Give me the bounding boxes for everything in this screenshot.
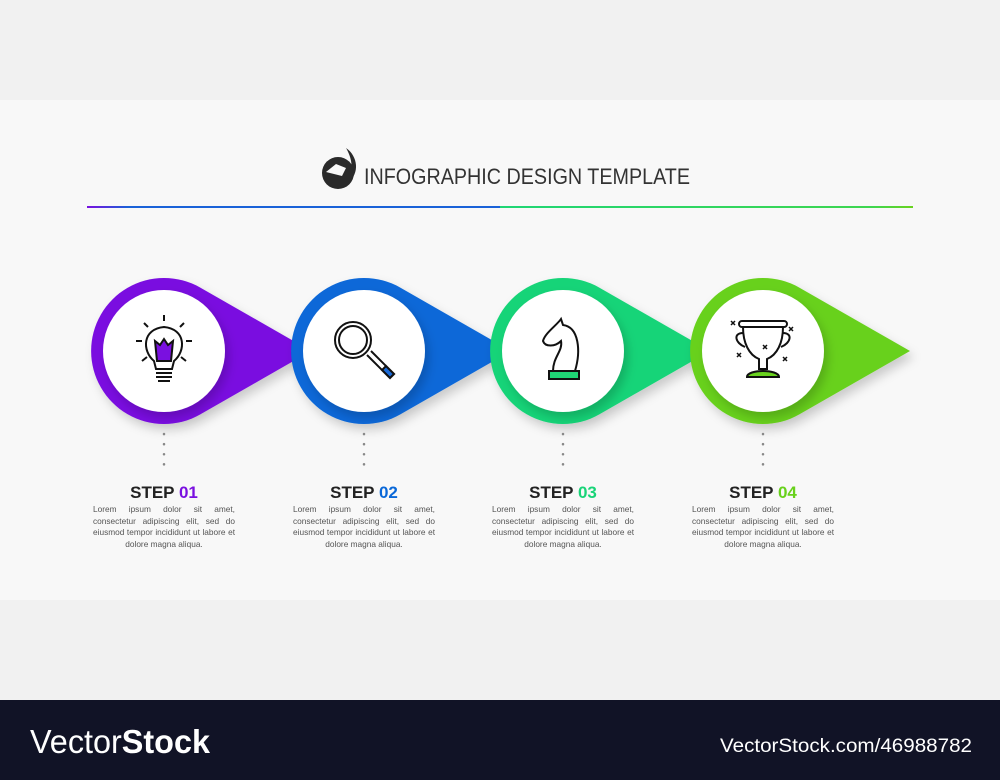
step 2 marker [291, 278, 511, 424]
step 2 text [293, 504, 435, 548]
step 2 text: eiusmod tempor incididunt ut labore et [293, 527, 435, 537]
step 1 heading: STEP 01 [130, 483, 198, 502]
icon: logo [322, 148, 356, 189]
step 4 text [692, 504, 834, 548]
icon: magnifier [335, 322, 394, 378]
title [322, 148, 690, 189]
step 3 text: dolore magna aliqua. [524, 538, 602, 548]
step 4 text: dolore magna aliqua. [724, 538, 802, 548]
step 2 heading [330, 434, 398, 502]
step 3 text: consectetur adipiscing elit, sed do [492, 516, 634, 526]
step 1 text: Lorem ipsum dolor sit amet, [93, 504, 235, 514]
icon: trophy [731, 321, 793, 377]
step 4 text: eiusmod tempor incididunt ut labore et [692, 527, 834, 537]
footer bar [0, 700, 1000, 780]
step 4 marker [690, 278, 910, 424]
title underline [87, 206, 913, 208]
step 4 text: consectetur adipiscing elit, sed do [692, 516, 834, 526]
step 3 heading [529, 434, 597, 502]
step 3 text: eiusmod tempor incididunt ut labore et [492, 527, 634, 537]
step 3 marker [490, 278, 710, 424]
step 3 text: Lorem ipsum dolor sit amet, [492, 504, 634, 514]
step 4 heading: STEP 04 [729, 483, 797, 502]
footer logo: VectorStock [30, 723, 211, 760]
icon: light bulb [136, 315, 192, 381]
step 2 text: Lorem ipsum dolor sit amet, [293, 504, 435, 514]
icon: chess knight [543, 319, 579, 379]
step 1 text: dolore magna aliqua. [125, 538, 203, 548]
step 1 marker [91, 278, 311, 424]
footer id: VectorStock.com/46988782 [720, 736, 972, 757]
step 4 heading [729, 434, 797, 502]
step 3 heading: STEP 03 [529, 483, 597, 502]
step 1 text: consectetur adipiscing elit, sed do [93, 516, 235, 526]
step 4 text: Lorem ipsum dolor sit amet, [692, 504, 834, 514]
step 3 text [492, 504, 634, 548]
step 2 text: consectetur adipiscing elit, sed do [293, 516, 435, 526]
step 1 text: eiusmod tempor incididunt ut labore et [93, 527, 235, 537]
title: INFOGRAPHIC DESIGN TEMPLATE [364, 164, 690, 189]
step 1 text [93, 504, 235, 548]
step 1 heading [130, 434, 198, 502]
step 2 text: dolore magna aliqua. [325, 538, 403, 548]
step 2 heading: STEP 02 [330, 483, 398, 502]
